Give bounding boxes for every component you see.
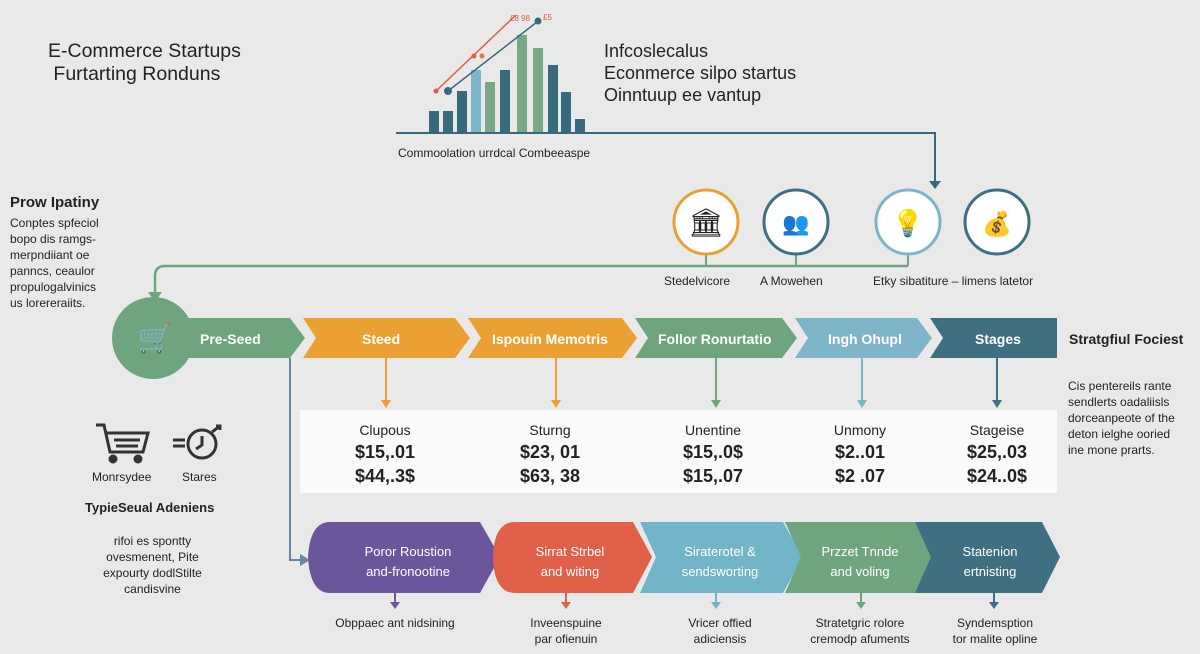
text: Unmony <box>834 422 886 438</box>
text: Steed <box>362 331 400 347</box>
left heading: Prow Ipatiny <box>10 194 99 211</box>
text: Syndemsption <box>957 616 1033 630</box>
text: Follor Ronurtatio <box>658 331 772 347</box>
right text: Cis pentereils rante <box>1068 379 1171 393</box>
left text: propulogalvinics <box>10 280 96 294</box>
text: Przzet Tnnde <box>821 544 899 559</box>
side connector <box>290 358 302 560</box>
text: Unentine <box>685 422 741 438</box>
text: sendsworting <box>682 564 758 579</box>
text: $15,.0$ <box>683 442 743 462</box>
icon circles: 💰 <box>982 210 1012 238</box>
text: ertnisting <box>964 564 1016 579</box>
text: $24..0$ <box>967 466 1027 486</box>
left sub text: candisvine <box>124 582 181 596</box>
bottom chevron labels <box>365 544 451 579</box>
left icons <box>96 425 220 462</box>
text: adiciensis <box>694 632 746 646</box>
values table <box>355 422 415 486</box>
title: Furtarting Ronduns <box>53 63 220 85</box>
left sub text <box>103 534 202 596</box>
title: E-Commerce Startups <box>48 40 241 62</box>
subtitle block: Econmerce silpo startus <box>604 63 796 83</box>
bottom chevrons <box>308 522 1060 593</box>
chart caption: Commoolation urrdcal Combeeaspe <box>398 146 590 160</box>
text: and voling <box>830 564 890 579</box>
values table: $44,.3$ <box>355 466 415 486</box>
left text: Conptes spfeciol <box>10 216 99 230</box>
text: Stageise <box>970 422 1024 438</box>
left icon labels: Monrsydee <box>92 470 151 484</box>
text: Inveenspuine <box>530 616 602 630</box>
right text <box>1068 379 1175 457</box>
left text: us lorereraiits. <box>10 296 85 310</box>
text: $2..01 <box>835 442 885 462</box>
left sub text: ovesmenent, Pite <box>106 550 199 564</box>
bottom arrows <box>390 593 999 609</box>
icon circles: 👥 <box>782 211 810 236</box>
left subheading: TypieSeual Adeniens <box>85 500 214 515</box>
left sub text: expourty dodlStilte <box>103 566 202 580</box>
left text <box>10 216 99 310</box>
connector top <box>396 133 935 183</box>
text: Stares <box>182 470 217 484</box>
right text: dorceanpeote of the <box>1068 411 1175 425</box>
right text: ine mone prarts. <box>1068 443 1155 457</box>
text: Sturng <box>529 422 571 438</box>
subtitle block: Infcoslecalus <box>604 41 708 61</box>
icon circles: 💡 <box>892 208 924 238</box>
text: tor malite opline <box>953 632 1037 646</box>
green connector <box>155 266 908 296</box>
subtitle block: Oinntuup ee vantup <box>604 85 761 105</box>
text: cremodp afuments <box>810 632 910 646</box>
stage chevrons: 🛒 <box>138 322 172 355</box>
drop lines <box>385 358 387 402</box>
values table: $15,.01 <box>355 442 415 462</box>
text: Siraterotel & <box>684 544 756 559</box>
left sub text: rifoi es spontty <box>114 534 191 548</box>
right text: deton ielghe ooried <box>1068 427 1170 441</box>
left text: panncs, ceaulor <box>10 264 95 278</box>
stage chevrons <box>112 297 1057 379</box>
text: $23, 01 <box>520 442 580 462</box>
left text: merpndiiant oe <box>10 248 89 262</box>
value box <box>300 410 1057 493</box>
title <box>48 40 241 85</box>
text: and witing <box>541 564 599 579</box>
icon circles <box>674 190 1029 254</box>
text: $25,.03 <box>967 442 1027 462</box>
text: $63, 38 <box>520 466 580 486</box>
values table: Clupous <box>359 422 411 438</box>
text: Sirrat Strbel <box>536 544 604 559</box>
text: Ispouin Memotris <box>492 331 608 347</box>
left text: bopo dis ramgs- <box>10 232 96 246</box>
right heading: Stratgfiul Fociest <box>1069 331 1183 347</box>
bottom captions: Obppaec ant nidsining <box>335 616 455 630</box>
text: Ingh Ohupl <box>828 331 902 347</box>
text: Statenion <box>963 544 1017 559</box>
text: par ofienuin <box>535 632 597 646</box>
text: Vricer offied <box>688 616 752 630</box>
stage labels: Pre-Seed <box>200 331 261 347</box>
bottom chevron labels: and-fronootine <box>366 564 450 579</box>
icon labels: Stedelvicore <box>664 274 730 288</box>
text: Etky sibatiture – limens latetor <box>873 274 1033 288</box>
bottom chevron labels: Poror Roustion <box>365 544 451 559</box>
right text: sendlerts oadaliisls <box>1068 395 1169 409</box>
bar chart <box>429 13 585 133</box>
text: Stages <box>975 331 1021 347</box>
text: $15,.07 <box>683 466 743 486</box>
text: $2 .07 <box>835 466 885 486</box>
bar chart: £5 <box>543 13 552 22</box>
icon circles: 🏛 <box>688 207 724 238</box>
text: Stratetgric rolore <box>816 616 904 630</box>
subtitle block <box>604 41 796 105</box>
text: A Mowehen <box>760 274 823 288</box>
bar chart: £8 98 <box>510 14 531 23</box>
